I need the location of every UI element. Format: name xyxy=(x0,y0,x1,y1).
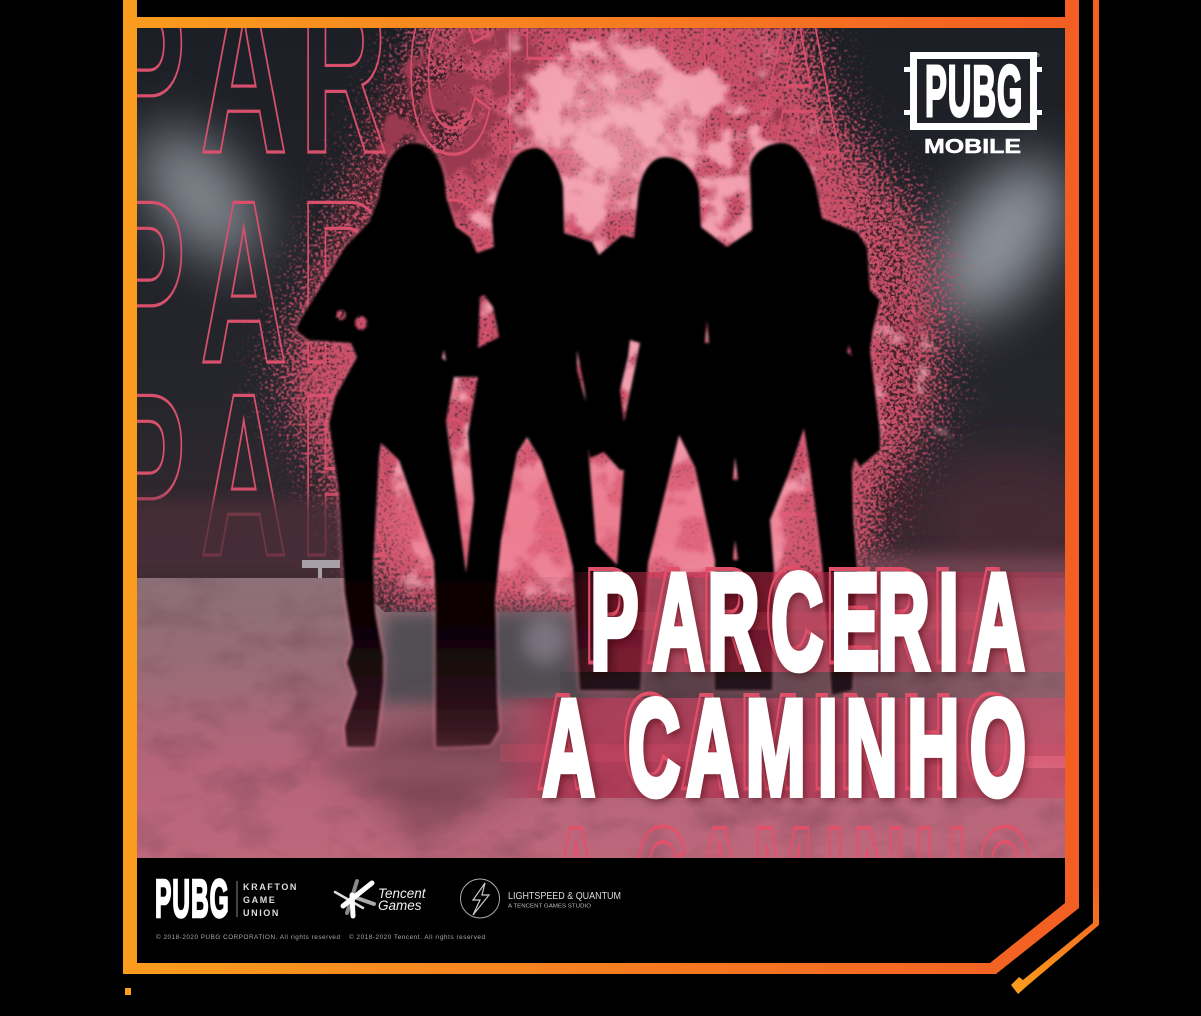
lower bright glow xyxy=(380,455,800,595)
footer logo: PUBG Krafton Game Union: PUBG xyxy=(155,868,230,929)
title: PARCERIA: PARCERIA xyxy=(590,546,1025,698)
footer logo: Tencent Games: Games xyxy=(378,898,422,913)
dark gap band xyxy=(560,672,1065,698)
footer logo: PUBG Krafton Game Union: UNION xyxy=(243,908,280,918)
footer logo: Lightspeed & Quantum xyxy=(460,879,621,918)
silhouettes of four figures xyxy=(296,143,880,747)
band light stripe lower xyxy=(500,744,1065,762)
pink dust cloud xyxy=(275,0,945,620)
footer logo: PUBG Krafton Game Union xyxy=(155,868,298,929)
logo: PUBG MOBILE xyxy=(904,50,1042,158)
spotlight: left grey glow xyxy=(118,108,282,282)
scene: explosion background xyxy=(137,28,1065,858)
bright cloud patches xyxy=(390,30,945,610)
orange frame xyxy=(123,0,1079,974)
mid-tone cloud mottling xyxy=(340,30,920,330)
fog over feet xyxy=(320,752,520,784)
pale grass flowers xyxy=(523,616,567,664)
band light stripe xyxy=(1025,756,1065,768)
soft horizon on right xyxy=(860,555,1100,600)
copyright notice Tencent: © 2018-2020 Tencent. All rights reserved xyxy=(349,933,485,941)
spotlight: right grey glow xyxy=(908,137,1092,343)
text band: second line xyxy=(495,698,1065,798)
background word row 2: PARCERIA xyxy=(105,154,842,412)
background word row 3: PARCERIA xyxy=(105,347,842,605)
footer panel xyxy=(137,858,1065,963)
ground with fog xyxy=(137,578,1065,858)
band light stripe upper xyxy=(600,612,1065,630)
central bright glow xyxy=(550,60,690,200)
logo: PUBG MOBILE: PUBG xyxy=(925,50,1023,131)
footer logo: PUBG Krafton Game Union: KRAFTON xyxy=(243,882,298,892)
signpost xyxy=(302,560,340,580)
small corner square xyxy=(125,988,131,995)
infographic poster xyxy=(123,0,1099,995)
copyright notice PUBG: © 2018-2020 PUBG CORPORATION. All rights reserved xyxy=(156,933,340,941)
grass patch xyxy=(380,614,590,705)
footer logo: Lightspeed & Quantum: A TENCENT GAMES STUDIO xyxy=(508,904,592,910)
text band: first line xyxy=(560,572,1065,672)
footer logo: Tencent Games: Tencent xyxy=(378,886,427,901)
shadow under figures xyxy=(340,700,540,830)
fog mottling xyxy=(137,577,1065,858)
distant dark treeline xyxy=(110,500,345,578)
outlined echo of title: A CAMINHO xyxy=(550,800,1033,952)
title pink offset line 1: PARCERIA xyxy=(584,540,1019,692)
footer logo: PUBG Krafton Game Union: GAME xyxy=(243,895,276,905)
logo: PUBG MOBILE: MOBILE xyxy=(924,136,1021,158)
title pink offset line 2: A CAMINHO xyxy=(537,666,1020,818)
right side smoke xyxy=(899,447,1065,554)
footer logo: Tencent Games xyxy=(335,881,427,916)
title: A CAMINHO: A CAMINHO xyxy=(543,672,1026,824)
outer accent line with diamond end xyxy=(1011,0,1099,994)
silhouette glow xyxy=(296,143,880,747)
footer logo: Lightspeed & Quantum: LIGHTSPEED & QUANTUM xyxy=(508,891,621,902)
logo: PUBG MOBILE: ® xyxy=(1036,52,1040,59)
dark speckle mottling in cloud xyxy=(300,40,950,560)
